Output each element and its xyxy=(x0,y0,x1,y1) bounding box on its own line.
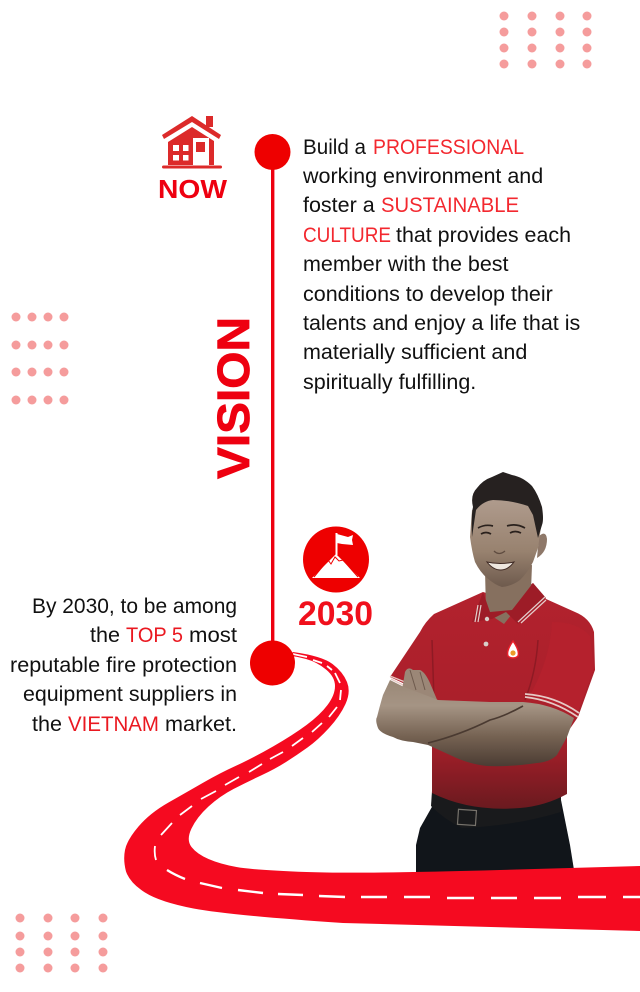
chimney xyxy=(206,116,213,127)
text block: 2030 vision: the xyxy=(90,623,120,647)
heading: VISION: VISION xyxy=(208,317,259,479)
left sleeve cuff stripes xyxy=(390,676,405,686)
smile xyxy=(487,562,514,570)
neck xyxy=(485,565,532,624)
text block: 2030 vision: the xyxy=(32,712,62,736)
door window xyxy=(196,142,205,152)
belt xyxy=(431,791,561,828)
right sleeve highlight xyxy=(530,622,594,712)
timeline node: now xyxy=(254,134,290,170)
text block: now vision: PROFESSIONAL xyxy=(373,135,524,159)
decorative dots: top right xyxy=(500,12,592,68)
ear xyxy=(537,534,547,558)
sleeve fold shadows xyxy=(432,640,538,700)
text block: 2030 vision: equipment suppliers in xyxy=(23,682,237,706)
label: 2030: 2030 xyxy=(298,595,373,633)
decorative dots: bottom left xyxy=(16,914,108,972)
collar xyxy=(472,583,546,624)
text block: 2030 vision: VIETNAM xyxy=(68,712,159,736)
hand fingers xyxy=(402,668,438,704)
timeline node: 2030 xyxy=(250,640,295,686)
text block: 2030 vision: reputable fire protection xyxy=(10,653,237,677)
text block: now vision: that provides each xyxy=(396,223,571,247)
text block: now vision: spiritually fulfilling. xyxy=(303,370,476,394)
snow line xyxy=(314,557,358,577)
collar stripes xyxy=(475,597,546,623)
text block: now vision: SUSTAINABLE xyxy=(381,193,519,217)
shirt torso and sleeves xyxy=(390,583,595,809)
door xyxy=(193,138,209,165)
eyes and brows xyxy=(478,525,525,534)
crossed arms xyxy=(376,680,574,766)
text block: 2030 vision: market. xyxy=(165,712,237,736)
mountain xyxy=(312,554,360,578)
road centre dashes: upper xyxy=(155,654,341,860)
text block: 2030 vision xyxy=(10,594,237,736)
arm crease xyxy=(428,706,523,743)
road centre dashes: lower xyxy=(167,870,640,898)
photo-style illustration: man in red polo with crossed arms xyxy=(376,472,595,874)
icon: mountain with flag xyxy=(303,526,369,592)
text block: now vision: talents and enjoy a life that is xyxy=(303,311,580,335)
decorative dots: left xyxy=(12,312,68,404)
timeline vertical line xyxy=(271,152,274,652)
belt buckle xyxy=(457,809,476,826)
finger lines xyxy=(410,670,425,690)
text block: 2030 vision: most xyxy=(189,623,237,647)
road xyxy=(124,652,640,931)
text block: now vision: foster a xyxy=(303,193,375,217)
flag pole xyxy=(336,533,338,555)
text block: now vision: member with the best xyxy=(303,252,509,276)
roof xyxy=(162,116,221,139)
text block: 2030 vision: TOP 5 xyxy=(126,623,183,647)
text block: now vision: materially sufficient and xyxy=(303,340,527,364)
flag xyxy=(337,534,353,545)
face xyxy=(470,498,542,587)
text block: now vision: working environment and xyxy=(302,164,543,188)
hair xyxy=(472,472,543,538)
right sleeve cuff stripes xyxy=(525,694,579,717)
window panes xyxy=(173,145,188,160)
text block: now vision: Build a xyxy=(303,135,366,159)
icon: house xyxy=(162,116,222,168)
road surface xyxy=(124,652,640,931)
text block: now vision: CULTURE xyxy=(303,223,391,247)
base line xyxy=(162,166,222,168)
label: NOW: NOW xyxy=(158,176,228,204)
house body xyxy=(168,127,214,165)
text block: now vision xyxy=(302,135,580,394)
text block: now vision: conditions to develop their xyxy=(303,282,553,306)
chest logo xyxy=(508,641,518,658)
buttons xyxy=(485,617,489,621)
trousers xyxy=(416,795,574,874)
text block: 2030 vision: By 2030, to be among xyxy=(32,594,237,618)
nose shadow xyxy=(494,551,505,554)
icon circle xyxy=(303,526,369,592)
